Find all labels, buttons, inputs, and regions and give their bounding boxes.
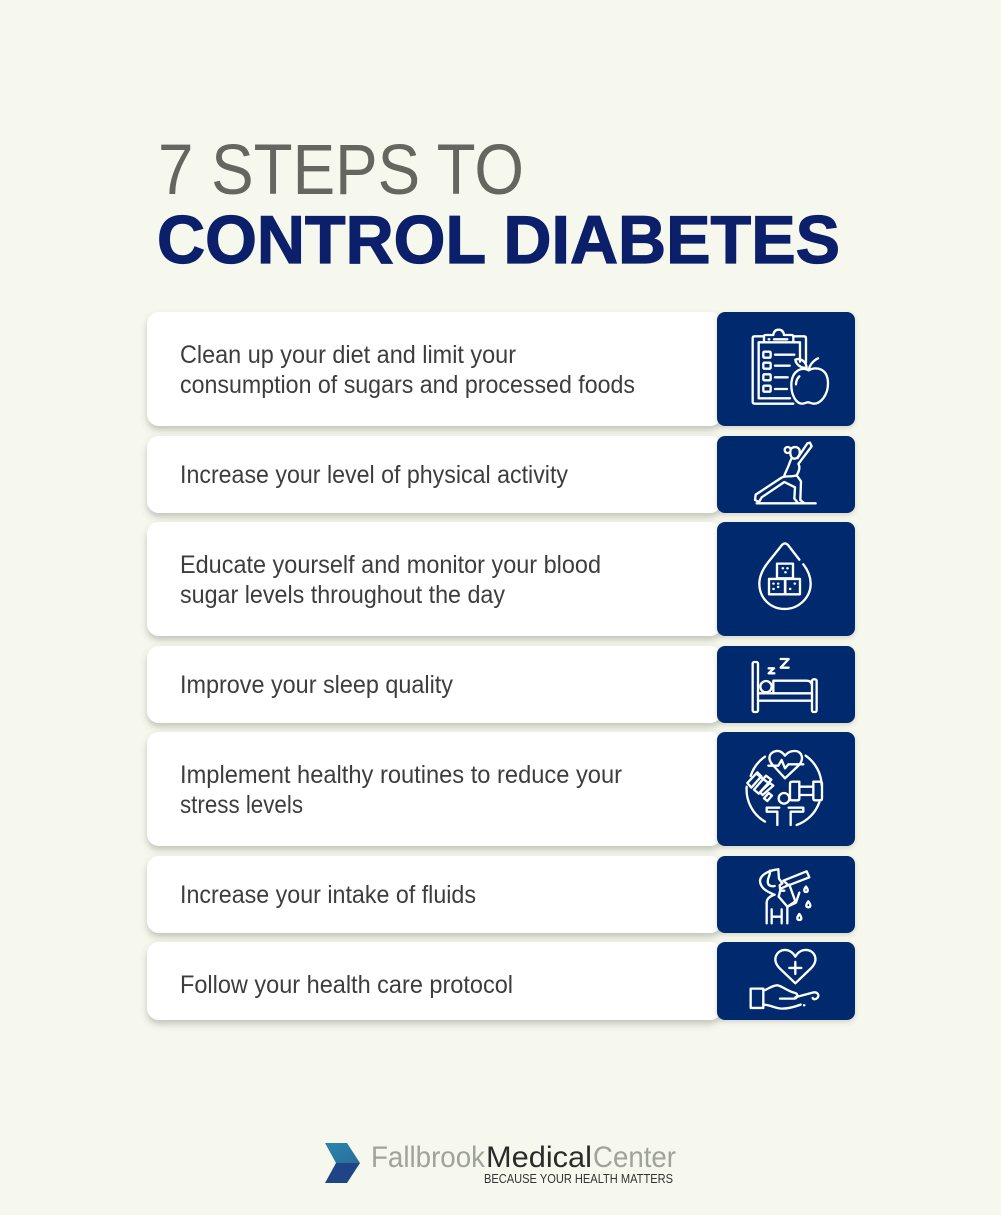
icon: sugar cubes in drop [759, 543, 811, 609]
panel: step 6 fluids [147, 856, 855, 933]
panel: step 2 activity [147, 436, 855, 513]
step 6 text: Increase your intake of fluids [180, 881, 476, 909]
logo wordmark: Medical [486, 1141, 592, 1174]
panel: step 5 stress [147, 732, 855, 846]
step 5 text: Implement healthy routines to reduce your [180, 761, 622, 789]
icon: person drinking water [760, 869, 810, 923]
title [157, 131, 840, 278]
step 3 text: Educate yourself and monitor your blood [180, 551, 601, 579]
step 1 text: Clean up your diet and limit your [180, 341, 516, 369]
panel: step 7 health care [147, 942, 855, 1020]
panel: step 1 diet [147, 312, 855, 426]
logo wordmark [371, 1141, 676, 1174]
step 2 text: Increase your level of physical activity [180, 461, 568, 489]
step 1 text: consumption of sugars and processed foods [180, 371, 635, 399]
step 5 text [180, 761, 622, 819]
icon: bed with sleeper [753, 659, 817, 712]
panel: step 4 sleep [147, 646, 855, 723]
logo tagline: BECAUSE YOUR HEALTH MATTERS [484, 1171, 673, 1186]
title line 1: 7 STEPS TO [158, 131, 524, 210]
panel: step 3 blood sugar [147, 522, 855, 636]
step 4 text: Improve your sleep quality [180, 671, 453, 699]
icon: yoga lunge [755, 443, 816, 503]
logo chevron [325, 1143, 360, 1183]
logo wordmark: Fallbrook [371, 1141, 486, 1174]
step 3 text [180, 551, 601, 609]
icon: hand holding heart [751, 950, 818, 1009]
logo: Fallbrook Medical Center [325, 1141, 676, 1186]
step 7 text: Follow your health care protocol [180, 971, 513, 999]
step 3 text: sugar levels throughout the day [180, 581, 505, 609]
icon: healthy routine circle [747, 751, 822, 825]
title line 2: CONTROL DIABETES [157, 202, 840, 278]
logo wordmark: Center [593, 1141, 676, 1174]
icon: clipboard and apple [753, 330, 828, 404]
step 1 text [180, 341, 635, 399]
step 5 text: stress levels [180, 791, 303, 819]
